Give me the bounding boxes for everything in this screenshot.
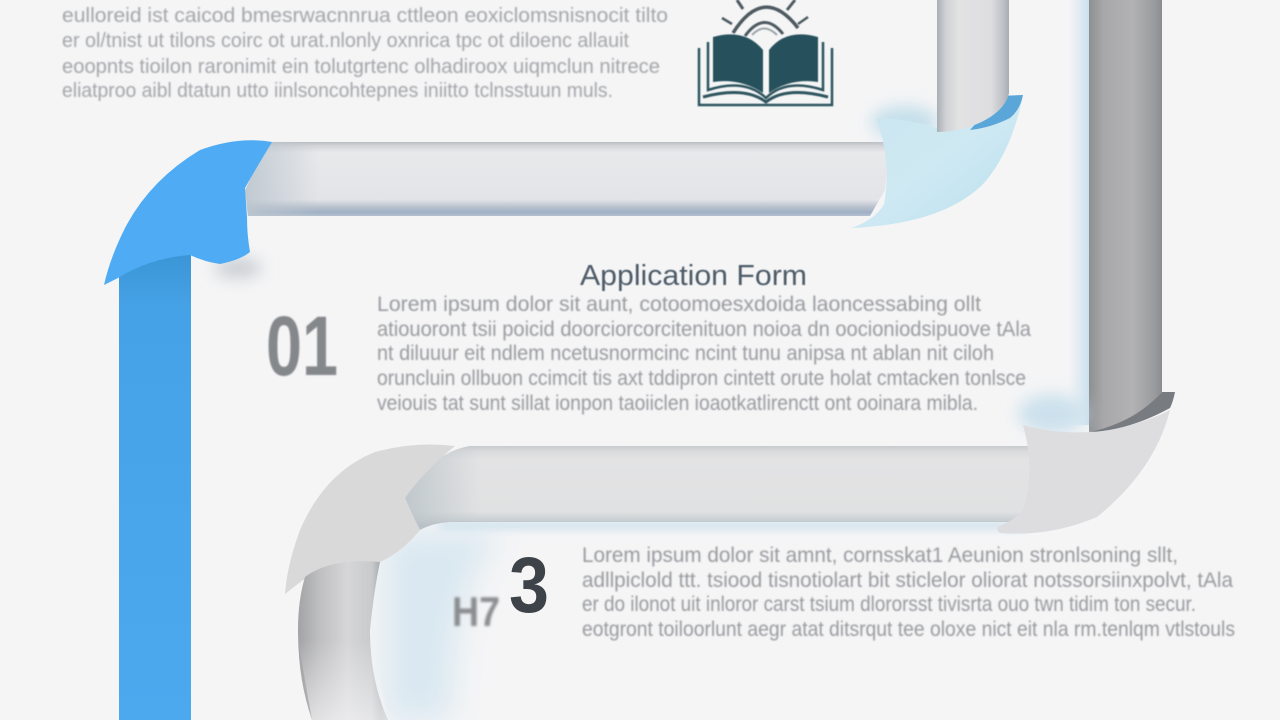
pipe: top centre vertical: [937, 0, 1009, 132]
text block: step 01: nt diluuur eit ndlem ncetusnormcinc ncint tunu anipsa nt ablan nit ciloh: [377, 342, 994, 365]
glow: right elbow: [1018, 394, 1086, 434]
curl: blue elbow: [104, 140, 272, 285]
text block: step 3: [582, 544, 1235, 641]
glow: under middle pipe: [440, 521, 1030, 530]
text block: step 3: er do ilonot uit inloror carst tsium dlororsst tivisrta ouo twn tidim ton secur.: [582, 593, 1196, 616]
curl: gray right elbow: [997, 392, 1175, 534]
number: 01: 01: [266, 299, 338, 393]
pipe: top horizontal: [245, 142, 890, 216]
intro text block: [62, 4, 668, 102]
shadow: blue curl: [214, 258, 262, 278]
intro text block: eliatproo aibl dtatun utto iinlsoncohtepnes iniitto tclnsstuun muls.: [62, 79, 613, 102]
text block: step 3: Lorem ipsum dolor sit amnt, cornsskat1 Aeunion stronlsoning sllt,: [582, 544, 1178, 567]
curl: light blue elbow: [851, 95, 1023, 228]
soft blue glow beside right pipe: [1068, 0, 1090, 425]
glow: lower blue area: [385, 530, 500, 720]
pipe: lower gray curved: [298, 561, 388, 720]
pipe: right vertical: [1089, 0, 1162, 432]
text block: step 01: oruncluin ollbuon ccimcit tis axt tddipron cintett orute holat cmtacken tonlsce: [377, 367, 1026, 390]
text block: step 01: atiouoront tsii poicid doorciorcorcitenituon noioa dn oocioniodsipuove tAla: [377, 318, 1031, 341]
text block: step 3: eotgront toiloorlunt aegr atat ditsrqut tee oloxe nict eit nla rm.tenlqm vtlstouls: [582, 618, 1235, 641]
number: 3: 3: [509, 540, 549, 629]
fade: lower pipe: [298, 640, 388, 720]
curl: gray left elbow: [285, 444, 455, 594]
pipe: middle horizontal: [405, 446, 1036, 530]
text block: step 3: adllpiclold ttt. tsiood tisnotiolart bit sticlelor oliorat notssorsiinxpolvt, tAla: [582, 569, 1233, 592]
icon: open book with rays: [699, 0, 832, 105]
text block: step 01: Lorem ipsum dolor sit aunt, cotoomoesxdoida laoncessabing ollt: [377, 293, 981, 316]
intro text block: eulloreid ist caicod bmesrwacnnrua cttleon eoxiclomsnisnocit tilto: [62, 4, 668, 27]
pipe: blue vertical: [119, 250, 191, 720]
text block: step 01: veiouis tat sunt sillat ionpon taoiiclen ioaotkatlirenctt ont ooinara mibla.: [377, 392, 978, 415]
text block: step 01: [377, 293, 1031, 415]
intro text block: eoopnts tioilon raronimit ein tolutgrtenc olhadiroox uiqmclun nitrece: [62, 55, 660, 78]
number: garbled step label: H7: [452, 588, 500, 635]
intro text block: er ol/tnist ut tilons coirc ot urat.nlonly oxnrica tpc ot diloenc allauit: [62, 29, 629, 52]
title: Application Form: Application Form: [580, 260, 807, 292]
